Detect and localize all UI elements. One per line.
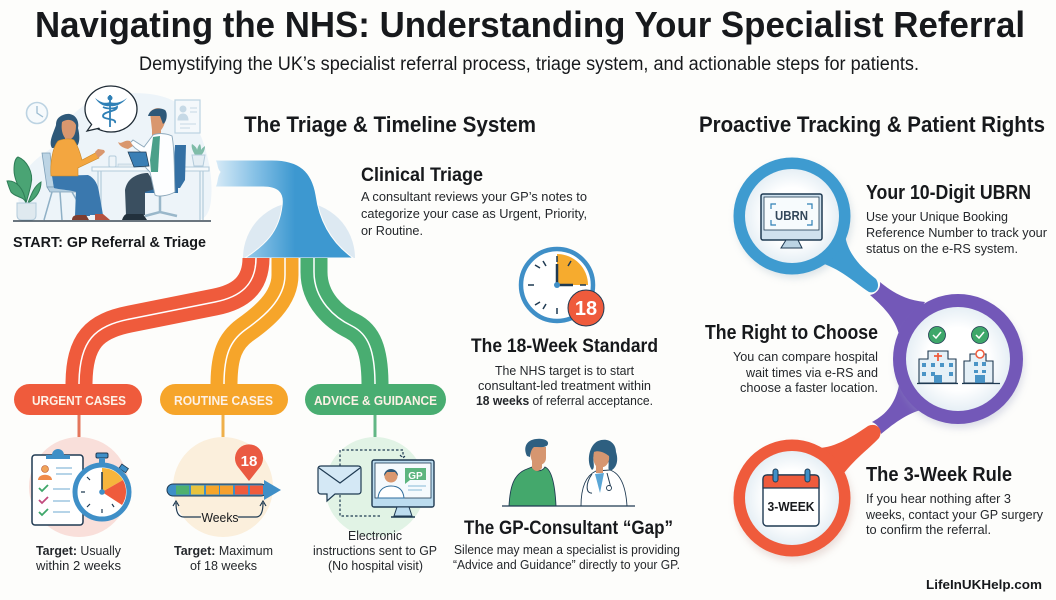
text block: right to choose: choose a faster location. (740, 380, 878, 395)
heading: triage and timeline: The Triage & Timeline System (244, 112, 536, 137)
pill: urgent cases (14, 384, 142, 415)
step: UBRN circle: UBRN (775, 209, 808, 223)
text: routine target: of 18 weeks (190, 558, 257, 573)
text: advice description: (No hospital visit) (328, 558, 423, 573)
speech bubble with caduceus (85, 86, 137, 132)
text block: UBRN: Your 10-Digit UBRN (866, 182, 1031, 204)
text block: 3-week rule: If you hear nothing after 3 (866, 491, 1011, 506)
text block: GP-consultant gap (453, 518, 680, 572)
step: 3-week circle (734, 425, 881, 561)
text block: right to choose: wait times via e-RS and (745, 365, 878, 380)
icon: clock with 18 badge: 18 (575, 298, 597, 320)
text: advice description: Electronic (348, 528, 402, 543)
step: hospital choice circle (893, 294, 1024, 428)
footer: website credit: LifeInUKHelp.com (926, 577, 1042, 592)
illustration: patient and consultant (502, 439, 635, 506)
text block: 18-week standard (471, 336, 658, 408)
icon: clock with 18 badge (521, 249, 604, 326)
text block: GP-consultant gap: “Advice and Guidance” directly to your GP. (453, 557, 680, 572)
text block: 3-week rule (865, 464, 1043, 537)
text block: right to choose: You can compare hospital (733, 349, 878, 364)
text block: clinical triage: Clinical Triage (361, 165, 483, 186)
text block: clinical triage (361, 165, 587, 238)
icon: routine 18-week timeline (167, 415, 281, 537)
icon: urgent clipboard and stopwatch (29, 415, 129, 537)
referral streams (79, 258, 375, 385)
step: 3-week circle: 3-WEEK (768, 499, 815, 514)
pill: advice and guidance (305, 384, 446, 415)
label: start: START: GP Referral & Triage (13, 234, 206, 251)
text block: UBRN: status on the e-RS system. (866, 241, 1018, 256)
text block: UBRN (866, 182, 1048, 256)
icon: electronic advice envelope and monitor: GP (408, 471, 423, 482)
text block: clinical triage: or Routine. (361, 223, 423, 238)
text: urgent target: within 2 weeks (35, 558, 121, 573)
illustration: GP consultation scene (7, 86, 212, 221)
text block: clinical triage: categorize your case as Urgent, Priority, (361, 206, 587, 221)
icon: electronic advice envelope and monitor (318, 415, 434, 537)
text: urgent target: Target: Usually (36, 543, 121, 558)
step: UBRN circle (734, 158, 878, 292)
text: advice description: instructions sent to GP (313, 543, 437, 558)
stream: advice (314, 258, 375, 385)
icon: routine 18-week timeline: Weeks (202, 510, 239, 525)
connector: purple tails (870, 282, 935, 434)
triage funnel (215, 160, 355, 258)
pill: routine cases: ROUTINE CASES (174, 393, 273, 408)
pill: advice and guidance: ADVICE & GUIDANCE (314, 393, 437, 408)
text block: GP-consultant gap: The GP-Consultant “Gap” (464, 518, 673, 539)
text block: 3-week rule: weeks, contact your GP surgery (865, 507, 1043, 522)
text block: right to choose: The Right to Choose (705, 322, 878, 344)
text block: clinical triage: A consultant reviews your GP’s notes to (361, 189, 587, 204)
text: advice description (313, 528, 437, 573)
text block: 18-week standard: The NHS target is to start (495, 363, 634, 378)
text block: UBRN: Use your Unique Booking (866, 209, 1008, 224)
stream: routine (224, 258, 285, 385)
text block: 18-week standard: The 18-Week Standard (471, 336, 658, 357)
text block: 3-week rule: The 3-Week Rule (866, 464, 1012, 486)
stream: urgent (79, 258, 256, 385)
text block: 18-week standard: 18 weeks of referral acceptance. (476, 393, 653, 408)
text: urgent target (35, 543, 121, 573)
text block: 18-week standard: consultant-led treatment within (478, 378, 651, 393)
text block: UBRN: Reference Number to track your (866, 225, 1048, 240)
text: routine target: Target: Maximum (174, 543, 273, 558)
subtitle: Demystifying the UK’s specialist referral process, triage system, and actionable steps for patients. (139, 54, 919, 75)
pill: urgent cases: URGENT CASES (32, 393, 126, 408)
title: Navigating the NHS: Understanding Your Specialist Referral (35, 4, 1025, 45)
text: routine target (174, 543, 273, 573)
text block: right to choose (705, 322, 878, 395)
icon: routine 18-week timeline: 18 (241, 453, 257, 470)
text block: GP-consultant gap: Silence may mean a specialist is providing (454, 542, 680, 557)
text block: 3-week rule: to confirm the referral. (866, 522, 991, 537)
pill: routine cases (160, 384, 288, 415)
